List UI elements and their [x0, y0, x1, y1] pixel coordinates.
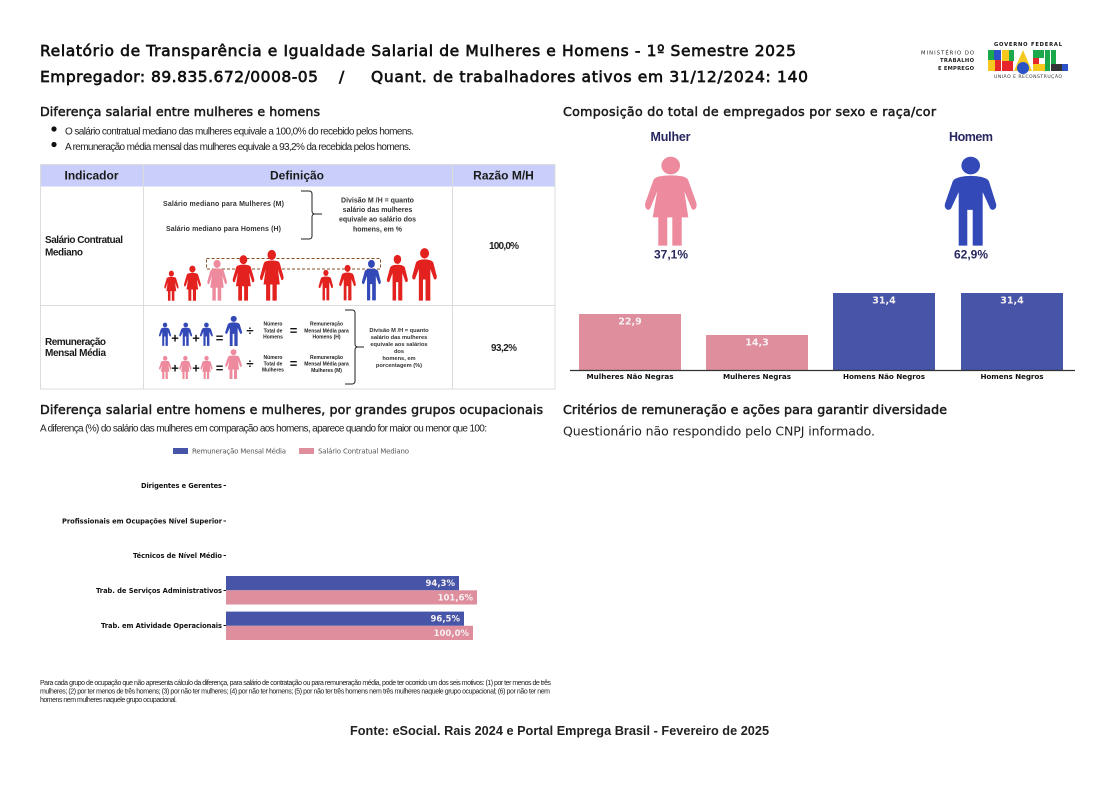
icons: women sum — [159, 349, 242, 379]
operators: = — [216, 360, 224, 376]
title: Relatório de Transparência e Igualdade Salarial de Mulheres e Homens - 1º Semestre 2025 — [40, 42, 796, 60]
row: remuneração mensal média: porcentagem (%) — [376, 363, 422, 369]
logo: ministério and governo federal: TRABALHO — [940, 58, 975, 64]
row: remuneração mensal média: Mensal Média para — [304, 328, 349, 334]
icons: women — [164, 250, 284, 301]
icon: mulher: Mulher — [650, 130, 691, 144]
row: remuneração mensal média: Remuneração — [310, 322, 343, 328]
row: remuneração mensal média: Número — [264, 322, 282, 328]
table header: Razão M/H — [473, 168, 534, 182]
icon: mulher — [645, 130, 697, 262]
row: remuneração mensal média: Homens (H) — [312, 334, 341, 340]
bullet list: O salário contratual mediano das mulheres equivale a 100,0% do recebido pelos homens. — [65, 126, 414, 138]
bar chart: sexo e raça/cor: Mulheres Negras — [723, 372, 791, 381]
row: remuneração mensal média: Divisão M /H = quanto — [369, 328, 429, 334]
bar chart: grupos ocupacionais: 96,5% — [430, 614, 460, 624]
footnote: Para cada grupo de ocupação que não apresenta cálculo da diferença, para salário de contratação ou para remuneração média, pode ter ocorrido um dos seis motivos: (1) por ter menos de três — [40, 680, 551, 687]
bar chart: grupos ocupacionais: Profissionais em Ocupações Nível Superior — [62, 518, 223, 526]
table header — [40, 164, 555, 186]
operators: = — [290, 356, 298, 371]
bar chart: grupos ocupacionais: Dirigentes e Gerentes — [141, 482, 222, 490]
text: descrição: A diferença (%) do salário das mulheres em comparação aos homens, aparece quando for maior ou menor que 100: — [40, 424, 487, 434]
title: Empregador: 89.835.672/0008-05 — [40, 68, 318, 86]
operators: + — [171, 330, 179, 346]
icons: men sum — [159, 316, 242, 346]
heading: diferença por grupos ocupacionais: Diferença salarial entre homens e mulheres, por grandes grupos ocupacionais — [40, 402, 543, 417]
icon: homem — [945, 130, 996, 262]
row: remuneração mensal média — [45, 310, 517, 384]
footnote — [40, 680, 551, 704]
row: remuneração mensal média: Homens — [263, 334, 283, 340]
heading: critérios: Critérios de remuneração e ações para garantir diversidade — [563, 402, 947, 417]
icon: mulher: 37,1% — [654, 248, 688, 262]
operators: = — [290, 323, 298, 338]
heading: composição: Composição do total de empregados por sexo e raça/cor — [563, 104, 937, 119]
text: questionário: Questionário não respondido pelo CNPJ informado. — [563, 424, 875, 438]
bar chart: grupos ocupacionais: Trab. em Atividade Operacionais — [101, 622, 222, 630]
logo: ministério and governo federal: E EMPREGO — [938, 66, 975, 72]
row: remuneração mensal média: Remuneração — [310, 355, 343, 361]
title: Quant. de trabalhadores ativos em 31/12/2024: 140 — [371, 68, 808, 86]
row: salário contratual mediano: equivale ao salário dos — [339, 216, 416, 224]
bar chart: sexo e raça/cor: Mulheres Não Negras — [586, 372, 674, 381]
table: indicadores — [40, 164, 555, 389]
title — [40, 42, 808, 86]
bar chart: sexo e raça/cor: Homens Negros — [980, 372, 1044, 381]
operators: ÷ — [246, 323, 254, 338]
row: remuneração mensal média: Remuneração — [45, 337, 106, 348]
row: salário contratual mediano: Mediano — [45, 248, 83, 258]
row: remuneração mensal média: Mulheres (M) — [311, 368, 342, 374]
bar chart: sexo e raça/cor: 31,4 — [872, 296, 896, 306]
row: salário contratual mediano — [45, 191, 519, 301]
footnote: mulheres; (2) por ter menos de três homens; (3) por não ter mulheres; (4) por não ter homens; (5) por não ter três homens nem três mulheres naquele grupo ocupacional; (6) por não ter nem — [40, 688, 550, 696]
row: remuneração mensal média: Mulheres — [262, 368, 284, 374]
footnote: homens nem mulheres naquele grupo ocupacional. — [40, 697, 177, 704]
brace — [345, 310, 364, 384]
row: remuneração mensal média: Total de — [264, 328, 283, 334]
row: remuneração mensal média: homens, em — [382, 356, 416, 362]
row: salário contratual mediano: Divisão M /H = quanto — [341, 198, 414, 204]
row: remuneração mensal média: 93,2% — [491, 343, 517, 354]
row: salário contratual mediano: homens, em % — [353, 226, 403, 234]
icon: homem: 62,9% — [954, 248, 988, 262]
row: salário contratual mediano: Salário Contratual — [45, 235, 123, 246]
bar chart: sexo e raça/cor: Homens Não Negros — [843, 372, 925, 381]
operators: + — [192, 330, 200, 346]
row: salário contratual mediano: Salário mediano para Mulheres (M) — [163, 201, 284, 208]
bar chart: sexo e raça/cor: 31,4 — [1000, 296, 1024, 306]
row: remuneração mensal média: Mensal Média — [45, 348, 106, 359]
bar chart: grupos ocupacionais: 100,0% — [434, 629, 469, 639]
icon: homem: Homem — [949, 130, 993, 144]
bar chart: grupos ocupacionais: Técnicos de Nível Médio — [133, 552, 222, 560]
legend: Salário Contratual Mediano — [318, 448, 409, 456]
bar chart: grupos ocupacionais: 94,3% — [426, 579, 455, 589]
row: remuneração mensal média: salário das mulheres — [371, 335, 427, 341]
bullet list — [51, 126, 414, 153]
table header: Indicador — [64, 168, 119, 182]
logo: ministério and governo federal — [921, 42, 1068, 80]
row: remuneração mensal média: Total de — [264, 362, 283, 368]
operators: = — [216, 330, 224, 346]
row: remuneração mensal média: Número — [264, 355, 282, 361]
row: remuneração mensal média: Mensal Média para — [304, 362, 349, 368]
row: remuneração mensal média: equivale aos salários — [370, 342, 428, 348]
row: remuneração mensal média: dos — [394, 349, 404, 355]
operators: + — [171, 360, 179, 376]
bar chart: sexo e raça/cor: 14,3 — [745, 338, 769, 348]
operators: ÷ — [246, 356, 254, 371]
logo: ministério and governo federal: MINISTÉRIO DO — [921, 48, 974, 56]
heading: diferença salarial entre mulheres e homens: Diferença salarial entre mulheres e homens — [40, 104, 320, 119]
table header: Definição — [270, 168, 324, 182]
logo: ministério and governo federal: GOVERNO FEDERAL — [994, 42, 1063, 48]
operators: + — [192, 360, 200, 376]
bar chart: sexo e raça/cor: 22,9 — [618, 316, 642, 328]
row: salário contratual mediano: 100,0% — [489, 241, 519, 252]
logo: ministério and governo federal: UNIÃO E RECONSTRUÇÃO — [994, 73, 1062, 80]
dashed median box — [206, 258, 380, 269]
bar chart: grupos ocupacionais — [62, 482, 477, 640]
legend — [173, 448, 409, 456]
icons: men — [319, 248, 437, 301]
title: / — [339, 68, 345, 86]
bar chart: sexo e raça/cor — [570, 293, 1075, 381]
bar chart: grupos ocupacionais: Trab. de Serviços Administrativos — [96, 587, 222, 595]
legend: Remuneração Mensal Média — [192, 448, 286, 456]
row: salário contratual mediano: Salário mediano para Homens (H) — [166, 226, 281, 233]
source: Fonte: eSocial. Rais 2024 e Portal Emprega Brasil - Fevereiro de 2025 — [350, 724, 769, 738]
row: salário contratual mediano: salário das mulheres — [343, 207, 412, 214]
operators — [171, 323, 298, 376]
bar chart: grupos ocupacionais: 101,6% — [438, 594, 473, 604]
brace — [301, 191, 322, 239]
bullet list: A remuneração média mensal das mulheres equivale a 93,2% da recebida pelos homens. — [65, 142, 411, 153]
